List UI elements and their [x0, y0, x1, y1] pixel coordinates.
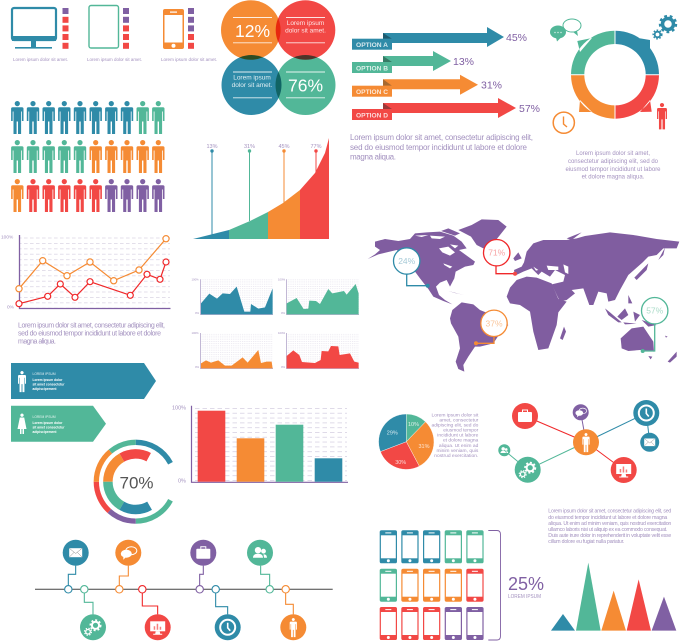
orange series — [16, 236, 169, 292]
panel: banner male — [11, 363, 156, 399]
hub person — [573, 429, 599, 455]
marker dots — [210, 149, 318, 153]
banner text: sit amet consectetur — [32, 426, 65, 430]
bar grid — [192, 406, 347, 482]
panel: venn circles — [221, 0, 336, 115]
pie labels: 10% — [408, 422, 419, 428]
option C: OPTION C — [356, 89, 388, 96]
outer ring — [96, 442, 170, 521]
panel: bar chart — [172, 406, 348, 484]
icon: phone — [163, 9, 184, 49]
callout 71 percent — [484, 240, 517, 276]
people row 3 — [11, 179, 164, 212]
area chart blue — [192, 278, 273, 315]
pie slices — [379, 414, 434, 469]
event gears — [80, 614, 106, 640]
chart grid — [20, 235, 170, 308]
monitor caption: Lorem ipsum dolor sit amet. — [13, 57, 68, 63]
icon: gears — [653, 16, 676, 39]
pie labels: 31% — [418, 444, 430, 450]
pie labels: 29% — [387, 431, 398, 437]
tablet squares — [123, 8, 129, 49]
bar labels: 0% — [178, 478, 186, 484]
paragraph: top right of triangles: ullamco laboris nisi ut aliquip ex ea commodo consequat. — [548, 527, 667, 533]
map: eurasia africa oceania — [507, 232, 679, 363]
red circle text: Lorem ipsum — [287, 20, 324, 27]
blue circle text: Lorem ipsum — [233, 74, 271, 82]
panel: ring chart — [96, 442, 170, 521]
donut paragraph: eiusmod tempor incididunt ut labore — [565, 167, 661, 173]
event chat — [115, 540, 141, 566]
circle rules — [233, 18, 325, 98]
panel: growth curve chart — [193, 138, 329, 239]
area chart red: 100% — [278, 331, 286, 335]
panel: small area charts — [192, 278, 359, 369]
event clock — [215, 614, 241, 640]
area chart green — [278, 278, 359, 315]
bracket — [488, 530, 500, 640]
area chart red — [278, 331, 359, 369]
area chart blue: 0% — [195, 311, 200, 315]
options paragraph: sed do eiusmod tempor incididunt ut labore et dolore — [350, 143, 528, 152]
pie paragraph: minim veniam, quis — [436, 448, 479, 454]
phones row 2 — [380, 569, 484, 602]
25 percent: 25% — [508, 574, 544, 594]
icon: monitor — [12, 8, 56, 49]
line chart paragraph: Lorem ipsum dolor sit amet, consectetur adipiscing elit, — [18, 322, 165, 330]
donut paragraph: et dolore magna aliqua. — [582, 174, 645, 180]
panel: timeline — [35, 540, 333, 640]
panel: option arrows — [350, 27, 540, 161]
option D — [352, 98, 540, 120]
icon: chat bubbles — [550, 19, 581, 42]
axes — [20, 235, 170, 308]
option B — [352, 51, 474, 73]
paragraph: top right of triangles: Duis aute irure dolor in reprehenderit in voluptate velit esse — [548, 533, 671, 539]
panel: banner female — [11, 406, 106, 442]
bar labels: 100% — [172, 406, 186, 412]
area chart green: 100% — [278, 278, 286, 282]
pie labels: 30% — [395, 460, 406, 466]
bar axes — [192, 406, 348, 482]
marker labels: 13% — [206, 144, 218, 150]
76 percent: 76% — [288, 76, 323, 96]
event monitor — [145, 614, 171, 640]
phones row 1 — [380, 530, 484, 563]
paragraph: top right of triangles: cillum dolore eu fugiat nulla pariatur. — [548, 539, 624, 545]
option D: 57% — [519, 103, 540, 115]
panel: world map — [368, 219, 679, 372]
area chart orange: 100% — [192, 331, 199, 335]
marker labels: 31% — [244, 144, 255, 150]
node monitor — [611, 457, 637, 483]
area chart blue: 100% — [192, 278, 199, 282]
option C: 31% — [481, 80, 502, 92]
icon: clock — [553, 112, 574, 133]
pie paragraph: Lorem ipsum dolor sit — [432, 412, 479, 418]
banner text: LOREM IPSUM — [32, 415, 56, 419]
banner shape blue — [11, 363, 156, 399]
banner text: adipiscipement — [32, 387, 57, 391]
panel: phone pictogram — [380, 530, 544, 640]
marker labels: 45% — [278, 144, 290, 150]
panel: triangle chart — [551, 563, 676, 631]
phone caption: Lorem ipsum dolor sit amet. — [161, 57, 217, 63]
donut segments — [571, 31, 659, 119]
lorem ipsum label: LOREM IPSUM — [508, 594, 541, 600]
12 percent: 12% — [235, 21, 270, 41]
callout 24 percent: 24% — [398, 256, 416, 266]
phones row 3 — [380, 607, 484, 640]
axis labels: 0% — [7, 304, 15, 310]
node mail — [640, 433, 659, 452]
marker lines — [212, 151, 316, 235]
panel: line chart — [1, 234, 170, 346]
pie paragraph: eiusmod tempor — [443, 427, 479, 433]
donut paragraph: consectetur adipiscing elit, sed do — [568, 159, 659, 165]
donut paragraph: Lorem ipsum dolor sit amet, — [576, 151, 650, 157]
node chat — [573, 404, 589, 420]
map: americas and greenland — [368, 219, 508, 372]
event briefcase — [190, 540, 216, 566]
pie paragraph: aliqua. Ut enim ad — [439, 443, 479, 449]
pie paragraph: amet, consectetur — [439, 418, 479, 424]
axis labels: 100% — [1, 234, 14, 240]
icon: male — [18, 371, 26, 392]
callout 57 percent: 57% — [646, 306, 664, 316]
red circle text: dolor sit amet. — [285, 28, 326, 34]
paragraph: top right of triangles: do eiusmod tempor incididunt ut labore et dolore magna — [548, 515, 667, 521]
monitor squares — [62, 8, 68, 49]
option A: OPTION A — [356, 42, 388, 49]
area chart orange: 0% — [195, 365, 200, 369]
option A — [352, 27, 527, 50]
area chart orange — [192, 331, 273, 369]
icon: person — [657, 103, 667, 129]
callout 71 percent: 71% — [488, 248, 506, 258]
pie paragraph: adipiscing elit, sed do — [432, 422, 479, 428]
icon: tablet — [89, 6, 118, 48]
panel: device icons — [12, 6, 217, 63]
curve segments — [193, 138, 329, 239]
tablet caption: Lorem ipsum dolor sit amet. — [87, 57, 142, 63]
option C — [352, 75, 502, 97]
line chart paragraph: magna aliqua. — [18, 338, 56, 346]
timeline axis — [35, 588, 333, 590]
callout 24 percent — [394, 248, 430, 288]
area chart green: 0% — [281, 311, 286, 315]
banner text: Lorem ipsum dolor — [32, 421, 63, 425]
network links — [504, 412, 650, 470]
option D: OPTION D — [356, 112, 388, 119]
options paragraph: Lorem ipsum dolor sit amet, consectetur adipiscing elit, — [350, 133, 533, 142]
pie paragraph: nostrud exercitation. — [434, 453, 478, 459]
timeline connectors — [68, 566, 293, 614]
panel: people pictogram — [11, 101, 164, 212]
bars — [198, 411, 342, 482]
icon: female — [18, 414, 26, 434]
node clock — [633, 400, 659, 426]
red series — [16, 259, 169, 307]
ring value: 70% — [119, 474, 154, 492]
paragraph: top right of triangles: aliqua. Ut enim ad minim veniam, quis nostrud exercitation — [548, 521, 671, 527]
callout 57 percent — [641, 298, 668, 353]
option B: 13% — [453, 56, 474, 68]
banner shape green — [11, 406, 106, 442]
paragraph: top right of triangles: Lorem ipsum dolor sit amet, consectetur adipiscing elit, sed — [548, 508, 671, 514]
panel: network diagram — [498, 400, 659, 483]
people row 1 — [11, 101, 164, 134]
panel: cycle donut — [550, 16, 676, 180]
banner text: LOREM IPSUM — [32, 372, 56, 376]
callout 37 percent — [474, 310, 507, 345]
banner text: sit amet consectetur — [32, 382, 65, 386]
line chart paragraph: sed do eiusmod tempor incididunt ut labore et dolore — [18, 330, 161, 338]
area chart red: 0% — [281, 365, 286, 369]
phone squares — [188, 8, 194, 49]
options paragraph: magna aliqua. — [350, 152, 396, 161]
timeline nodes — [65, 586, 289, 593]
event person — [280, 614, 306, 640]
option A: 45% — [506, 32, 527, 44]
people row 2 — [11, 140, 164, 173]
banner text: adipiscipement — [32, 430, 57, 434]
blue circle text: dolor sit amet. — [232, 82, 273, 89]
pie paragraph: et dolore magna — [443, 437, 479, 443]
node briefcase — [512, 403, 538, 429]
banner text: Lorem ipsum dolor — [32, 378, 63, 382]
node user — [498, 444, 510, 456]
node gears — [515, 457, 541, 483]
option B: OPTION B — [356, 65, 388, 72]
marker labels: 77% — [310, 144, 322, 150]
event users — [247, 540, 273, 566]
callout 37 percent: 37% — [485, 318, 503, 328]
event mail — [63, 540, 89, 566]
overlapping circles — [221, 0, 336, 115]
panel: pie chart — [379, 412, 479, 469]
pie paragraph: incididunt ut labore — [437, 432, 479, 438]
inner ring — [108, 454, 150, 510]
